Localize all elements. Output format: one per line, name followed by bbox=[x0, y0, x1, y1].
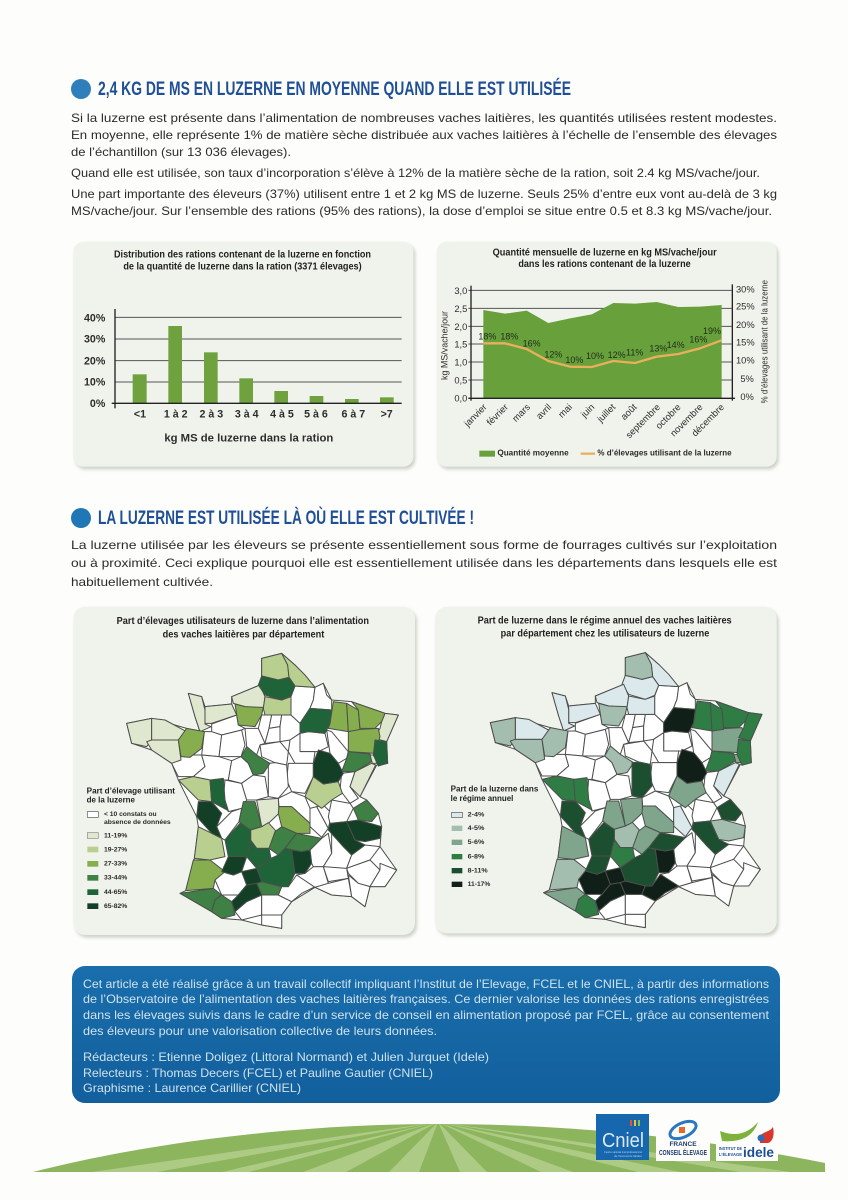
bar chart: 4 à 5 bbox=[270, 409, 294, 421]
area and line chart: 12% bbox=[544, 349, 562, 359]
callout: credits box bbox=[72, 966, 780, 1103]
bar chart: 0% bbox=[90, 398, 106, 410]
area and line chart: 0,0 bbox=[454, 394, 467, 404]
choropleth map of France bbox=[127, 653, 398, 928]
map legend: < 10 constats ou bbox=[104, 812, 157, 818]
text block: article credits bbox=[83, 977, 770, 1095]
choropleth map of France bbox=[490, 653, 762, 928]
logo: Idele: L’ÉLEVAGE bbox=[719, 1150, 743, 1158]
heading: section 1: 2,4 KG DE MS EN LUZERNE EN MOYENNE QUAND ELLE EST UTILISÉE bbox=[98, 78, 571, 100]
area and line chart: 16% bbox=[523, 338, 541, 348]
chart legend bbox=[479, 449, 732, 458]
area and line chart: 30% bbox=[736, 285, 755, 295]
area and line chart: % d’élevages utilisant de la luzerne bbox=[759, 280, 769, 403]
area and line chart: octobre bbox=[654, 402, 683, 431]
logo: Cniel: de l’économie laitière bbox=[614, 1154, 642, 1158]
panel: monthly line and area chart bbox=[437, 242, 779, 469]
map legend: 5-6% bbox=[468, 840, 485, 846]
map title bbox=[478, 615, 732, 640]
map legend: 33-44% bbox=[104, 876, 128, 882]
map legend: le régime annuel bbox=[451, 794, 513, 803]
text block: section 1 intro: MS/vache/jour. Sur l’ensemble des rations (95% des rations), la dose d’emploi se situe entre 0.5 et 8.3 kg MS/vache/jour. bbox=[71, 204, 772, 218]
text block: section 1 intro: de l’échantillon (sur 13 036 élevages). bbox=[71, 145, 291, 159]
text block: article credits: Relecteurs : Thomas Decers (FCEL) et Pauline Gautier (CNIEL) bbox=[83, 1066, 433, 1080]
map title: des vaches laitières par département bbox=[163, 629, 325, 640]
map title: par département chez les utilisateurs de luzerne bbox=[501, 629, 710, 640]
area and line chart: 0% bbox=[740, 392, 754, 402]
bar chart: 3 à 4 bbox=[235, 409, 259, 421]
text block: article credits: dans les élevages suivis dans le cadre d’un service de conseil en alimentation proposé par FCEL, grâce au consentement bbox=[83, 1008, 770, 1022]
map legend: Part d’élevage utilisant bbox=[87, 786, 175, 795]
map legend bbox=[451, 785, 539, 888]
logo: Cniel bbox=[596, 1114, 649, 1160]
heading: section 2 bbox=[71, 507, 474, 529]
map legend: 8-11% bbox=[468, 868, 488, 874]
bar chart bbox=[84, 309, 402, 445]
map legend: 44-65% bbox=[104, 890, 128, 896]
chart title: de la quantité de luzerne dans la ration (3371 élevages) bbox=[123, 262, 362, 273]
area and line chart: kg MS/vache/jour bbox=[439, 311, 449, 380]
text block: article credits: de l’Observatoire de l’alimentation des vaches laitières françaises. Ce dernier valorise les données des rations enregistrées bbox=[83, 992, 769, 1006]
area and line chart: 15% bbox=[736, 338, 755, 348]
area and line chart: mai bbox=[556, 402, 574, 420]
heading: section 2: LA LUZERNE EST UTILISÉE LÀ OÙ ELLE EST CULTIVÉE ! bbox=[98, 507, 474, 529]
map legend: 6-8% bbox=[468, 854, 485, 860]
area and line chart: avril bbox=[534, 402, 553, 421]
heading: section 1 bbox=[71, 78, 571, 100]
text block: section 2 intro: La luzerne utilisée par les éleveurs se présente essentiellement sous forme de fourrages cultivés sur l’exploitation bbox=[71, 538, 777, 552]
area and line chart: 13% bbox=[649, 343, 667, 353]
logo: Idele bbox=[716, 1122, 778, 1161]
logo: France Conseil Elevage bbox=[656, 1118, 710, 1161]
area and line chart bbox=[439, 280, 769, 440]
area and line chart: 2,0 bbox=[454, 322, 467, 332]
chart title: dans les rations contenant de la luzerne bbox=[518, 259, 691, 270]
area and line chart: janvier bbox=[462, 402, 489, 429]
logo: Idele: INSTITUT DE bbox=[719, 1146, 743, 1152]
area and line chart: 20% bbox=[736, 320, 755, 330]
area and line chart: 11% bbox=[626, 347, 643, 357]
area and line chart: 25% bbox=[736, 302, 755, 312]
panel: map share of alfalfa in annual diet bbox=[435, 607, 779, 936]
map legend: 27-33% bbox=[104, 862, 128, 868]
area and line chart: 3,0 bbox=[454, 286, 467, 296]
decorative green field with rays bbox=[33, 1124, 825, 1172]
chart legend: Quantité moyenne bbox=[497, 449, 569, 458]
area and line chart: 10% bbox=[586, 351, 604, 361]
bar chart: 2 à 3 bbox=[199, 409, 223, 421]
area and line chart: 1,0 bbox=[454, 358, 467, 368]
logo: France Conseil Elevage: CONSEIL ÉLEVAGE bbox=[659, 1148, 707, 1157]
chart legend: % d’élevages utilisant de la luzerne bbox=[597, 449, 732, 458]
area and line chart: 18% bbox=[478, 332, 496, 342]
area and line chart: décembre bbox=[690, 402, 726, 438]
map legend: 2-4% bbox=[468, 813, 485, 819]
map title bbox=[117, 616, 369, 640]
area and line chart: 19% bbox=[703, 326, 721, 336]
area and line chart: 0,5 bbox=[454, 376, 467, 386]
text block: section 1 intro: En moyenne, elle représente 1% de matière sèche distribuée aux vaches laitières à l’échelle de l’ensemble des élevages bbox=[71, 128, 777, 142]
map legend: absence de données bbox=[104, 820, 171, 826]
area and line chart: 12% bbox=[608, 350, 626, 360]
map title: Part d’élevages utilisateurs de luzerne dans l’alimentation bbox=[117, 616, 369, 627]
map legend: de la luzerne bbox=[87, 796, 136, 805]
bar chart: 5 à 6 bbox=[304, 409, 328, 421]
area and line chart: 1,5 bbox=[454, 340, 467, 350]
area and line chart: 14% bbox=[667, 340, 685, 350]
area and line chart: août bbox=[619, 402, 639, 422]
chart title: Distribution des rations contenant de la luzerne en fonction bbox=[114, 250, 371, 261]
area and line chart: novembre bbox=[668, 402, 705, 438]
bar chart: 1 à 2 bbox=[164, 409, 188, 421]
map legend: Part de la luzerne dans bbox=[451, 785, 539, 794]
area and line chart: 10% bbox=[736, 355, 755, 365]
map title: Part de luzerne dans le régime annuel des vaches laitières bbox=[478, 615, 732, 626]
map legend: 11-17% bbox=[468, 882, 491, 888]
panel: bar chart distribution bbox=[73, 242, 415, 469]
text block: section 1 intro bbox=[71, 111, 777, 218]
text block: section 2 intro: habituellement cultivée. bbox=[71, 575, 213, 589]
area and line chart: 16% bbox=[689, 334, 707, 344]
bar chart: 40% bbox=[84, 313, 106, 325]
area and line chart: juillet bbox=[595, 402, 618, 425]
map legend: 19-27% bbox=[104, 847, 128, 853]
area and line chart: février bbox=[485, 402, 510, 427]
bar chart: >7 bbox=[381, 409, 393, 421]
area and line chart: juin bbox=[578, 402, 596, 420]
bar chart: 6 à 7 bbox=[341, 409, 365, 421]
text block: section 1 intro: Quand elle est utilisée, son taux d’incorporation s’élève à 12% de la matière sèche de la ration, soit 2.4 kg MS/vache/jour. bbox=[71, 166, 760, 180]
logo: Cniel: Centre national interprofessionnel bbox=[604, 1150, 642, 1154]
chart title: Quantité mensuelle de luzerne en kg MS/vache/jour bbox=[493, 248, 717, 259]
bar chart: 20% bbox=[84, 355, 106, 367]
bar chart: <1 bbox=[134, 409, 146, 421]
chart title bbox=[493, 248, 717, 270]
area and line chart: 5% bbox=[740, 374, 754, 384]
text block: section 2 intro: ou à proximité. Ceci explique pourquoi elle est essentiellement utilisée dans les départements dans lesquels elle est bbox=[71, 556, 778, 570]
map legend: 4-5% bbox=[468, 826, 485, 832]
area and line chart: 10% bbox=[565, 355, 583, 365]
panel: map share of farms using alfalfa bbox=[73, 607, 417, 938]
area and line chart: septembre bbox=[624, 402, 662, 440]
bar chart: kg MS de luzerne dans la ration bbox=[164, 433, 333, 445]
area and line chart: mars bbox=[510, 402, 532, 424]
bar chart: 10% bbox=[84, 377, 106, 389]
text block: article credits: des éleveurs pour une valorisation collective de leurs données. bbox=[83, 1024, 437, 1038]
chart title bbox=[114, 250, 371, 273]
logo: France Conseil Elevage: FRANCE bbox=[669, 1141, 697, 1148]
logo: Idele: idele bbox=[743, 1144, 774, 1160]
text block: section 1 intro: Une part importante des éleveurs (37%) utilisent entre 1 et 2 kg MS de luzerne. Seuls 25% d’entre eux vont au-delà de 3 kg bbox=[71, 187, 777, 201]
area and line chart: 2,5 bbox=[454, 304, 467, 314]
text block: section 2 intro bbox=[71, 538, 778, 589]
map legend bbox=[87, 786, 175, 910]
logo: Cniel: Cniel bbox=[602, 1130, 644, 1152]
bar chart: 30% bbox=[84, 334, 106, 346]
text block: article credits: Cet article a été réalisé grâce à un travail collectif impliquant l’Institut de l’Elevage, FCEL et le CNIEL, à partir des informations bbox=[83, 977, 769, 991]
map legend: 65-82% bbox=[104, 904, 128, 910]
text block: article credits: Rédacteurs : Etienne Doligez (Littoral Normand) et Julien Jurquet (Idele) bbox=[83, 1050, 489, 1064]
map legend: 11-19% bbox=[104, 833, 128, 839]
text block: section 1 intro: Si la luzerne est présente dans l’alimentation de nombreuses vaches laitières, les quantités utilisées restent modestes. bbox=[71, 111, 777, 125]
area and line chart: 18% bbox=[500, 332, 518, 342]
text block: article credits: Graphisme : Laurence Carillier (CNIEL) bbox=[83, 1081, 301, 1095]
